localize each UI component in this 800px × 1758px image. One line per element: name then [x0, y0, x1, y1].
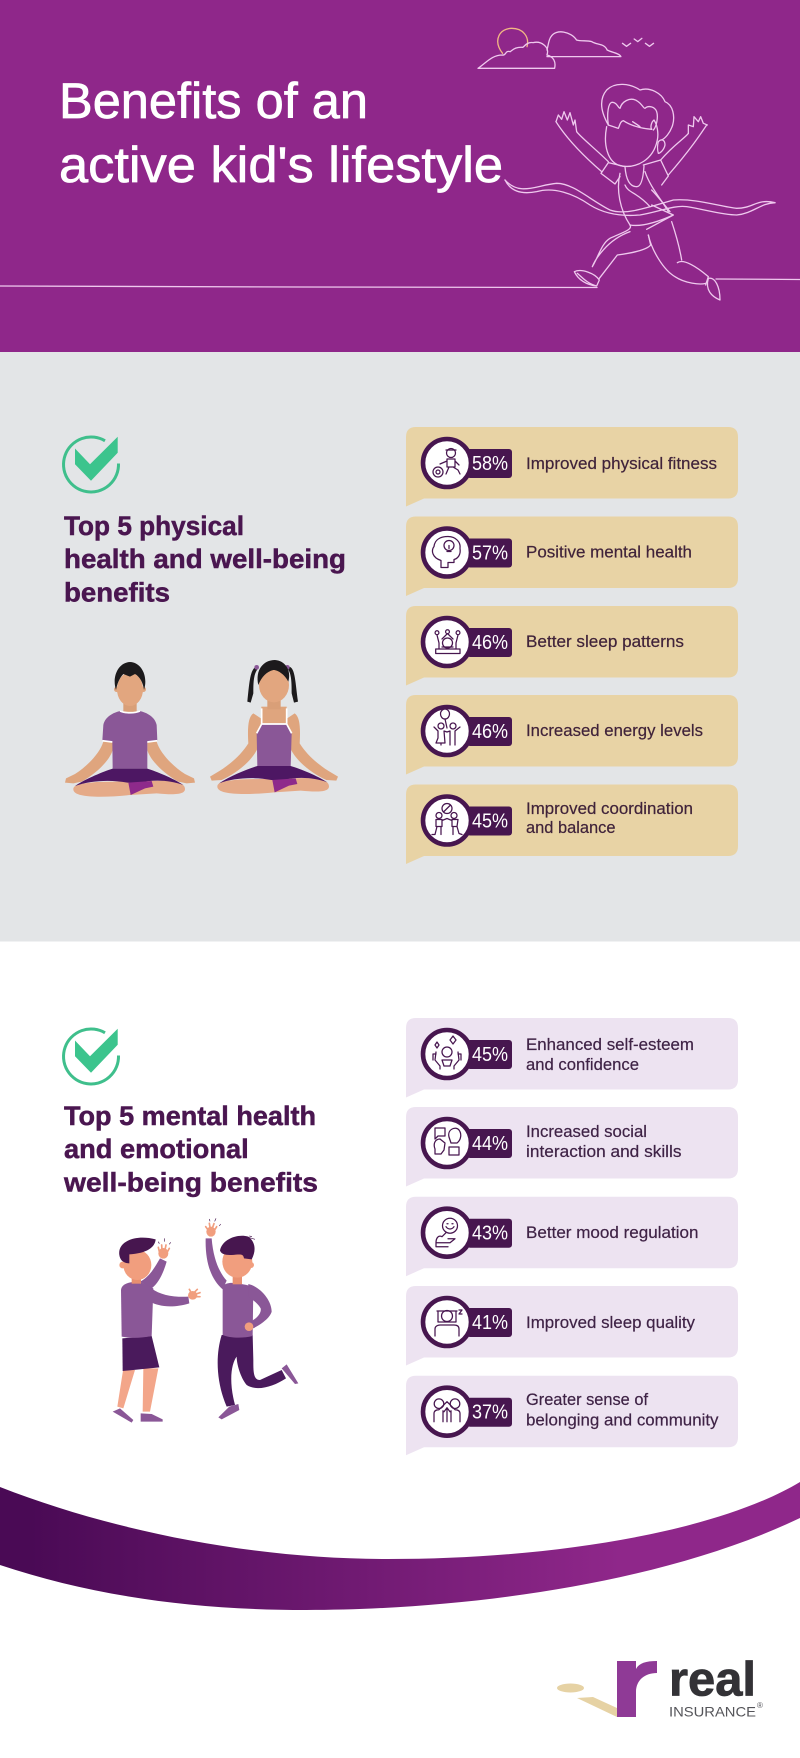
title: [59, 73, 503, 193]
panel: header: [0, 0, 800, 352]
card: improved sleep quality: Improved sleep quality: [526, 1314, 696, 1332]
icon: mental check mark: [64, 1029, 119, 1084]
card: improved sleep quality: 41%: [472, 1311, 508, 1334]
heading: mental benefits: and emotional: [64, 1134, 249, 1164]
card: enhanced self-esteem: and confidence: [526, 1056, 639, 1074]
card: better mood regulation: [406, 1197, 738, 1276]
card: positive mental health: 57%: [472, 542, 508, 564]
card: positive mental health: [406, 516, 738, 596]
illustration: two boys high-fiving: [113, 1218, 298, 1423]
card: increased energy levels: [406, 695, 738, 774]
illustration: ground line: [0, 279, 800, 288]
card: improved physical fitness: 58%: [472, 452, 508, 475]
card: better mood regulation: Better mood regulation: [526, 1224, 698, 1242]
card: increased social interaction: 44%: [472, 1132, 508, 1155]
boy left: [113, 1238, 200, 1423]
card: improved coordination and balance: Improved coordination: [526, 800, 693, 818]
card: positive mental health: Positive mental health: [526, 544, 692, 562]
card: improved physical fitness: [406, 427, 738, 506]
card: increased social interaction: interaction and skills: [526, 1143, 682, 1161]
logo: real insurance: INSURANCE: [669, 1704, 756, 1720]
illustration: clouds, sun and birds: [478, 28, 654, 68]
boy right: [206, 1218, 298, 1419]
list: physical benefits: [406, 427, 738, 864]
card: greater sense of belonging: [406, 1376, 738, 1455]
illustration: boy and girl meditating: [65, 660, 338, 797]
card: increased energy levels: Increased energy levels: [526, 722, 703, 740]
card: better sleep patterns: Better sleep patterns: [526, 633, 684, 651]
card: increased social interaction: Increased social: [526, 1123, 647, 1141]
boy: [65, 662, 195, 797]
card: greater sense of belonging: Greater sense of: [526, 1391, 648, 1409]
card: better sleep patterns: [406, 606, 738, 686]
heading: physical benefits: Top 5 physical: [64, 511, 244, 541]
card: increased social interaction: [406, 1107, 738, 1186]
card: increased energy levels: 46%: [472, 720, 508, 743]
heading: mental benefits: well-being benefits: [63, 1168, 318, 1198]
illustration: line-art runner with ribbon: [505, 84, 775, 300]
card: better mood regulation: 43%: [472, 1222, 508, 1245]
card: improved coordination and balance: [406, 784, 738, 864]
card: better sleep patterns: 46%: [472, 631, 508, 654]
card: improved physical fitness: Improved physical fitness: [526, 455, 717, 473]
panel: physical health background: [0, 352, 800, 942]
card: enhanced self-esteem: [406, 1018, 738, 1098]
card: improved sleep quality: [406, 1286, 738, 1366]
logo: real insurance: ®: [757, 1701, 763, 1710]
logo: real insurance: real: [669, 1654, 756, 1707]
heading: mental benefits: [63, 1101, 318, 1198]
card: enhanced self-esteem: Enhanced self-esteem: [526, 1036, 694, 1054]
card: improved coordination and balance: 45%: [472, 810, 508, 832]
card: enhanced self-esteem: 45%: [472, 1043, 508, 1066]
heading: mental benefits: Top 5 mental health: [64, 1101, 316, 1131]
footer swoosh: [0, 1482, 800, 1610]
list: mental benefits: [406, 1018, 738, 1455]
heading: physical benefits: benefits: [64, 578, 170, 608]
card: improved coordination and balance: and balance: [526, 819, 616, 837]
icon: physical check mark: [64, 437, 119, 492]
heading: physical benefits: health and well-being: [64, 544, 346, 574]
card: greater sense of belonging: belonging and community: [526, 1412, 719, 1430]
title: active kid's lifestyle: [59, 137, 503, 193]
heading: physical benefits: [64, 511, 346, 608]
girl: [210, 660, 338, 794]
title: Benefits of an: [59, 73, 368, 129]
logo: real insurance: [557, 1654, 763, 1720]
card: greater sense of belonging: 37%: [472, 1401, 508, 1424]
